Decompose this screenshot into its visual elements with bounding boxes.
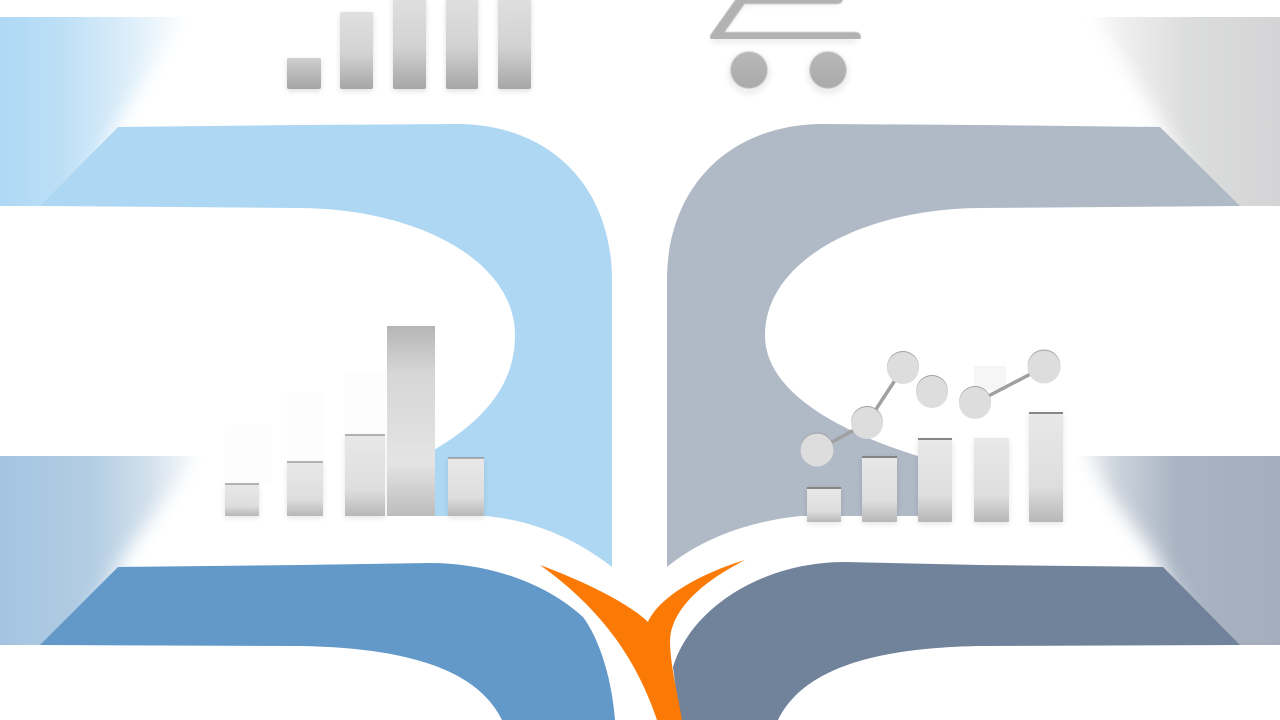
bar 5	[1029, 412, 1063, 522]
bar 3	[918, 438, 952, 522]
bar 3	[345, 435, 385, 516]
icon: orange forked swoosh	[540, 560, 745, 720]
bar top edges	[807, 413, 1063, 488]
icon: shopping cart	[715, 0, 856, 91]
bar reflection backdrop	[225, 370, 385, 484]
bar 2	[287, 462, 323, 516]
bar 4 tall	[387, 326, 435, 516]
bar 4	[974, 438, 1009, 522]
chart: top bar icon	[287, 0, 531, 91]
bar shadows	[807, 414, 1063, 524]
bar 1	[807, 487, 841, 522]
panel: grey curved band	[667, 124, 1240, 567]
marker top rims	[800, 350, 1060, 466]
cart left wheel	[730, 52, 768, 88]
chart: left bar chart	[225, 326, 484, 518]
faint reflection block	[974, 366, 1006, 390]
bar 1	[287, 58, 321, 89]
bar 2	[340, 12, 373, 89]
bar 5	[498, 0, 531, 89]
cart right wheel	[810, 52, 846, 88]
panel: bottom-left blue fade strip	[0, 456, 210, 645]
bar 5	[448, 458, 484, 516]
bar top edges	[225, 435, 484, 484]
bar 1	[225, 484, 259, 516]
cart frame	[715, 0, 856, 37]
panel: blue lower curved band	[40, 563, 615, 720]
cart shadow	[715, 2, 856, 91]
bar shadows	[287, 0, 531, 91]
chart: right bar and line chart	[800, 350, 1063, 524]
panel: top-right grey fade strip	[1080, 17, 1280, 206]
bar 3	[393, 0, 426, 89]
panel: light blue curved band	[40, 124, 612, 567]
bar 2	[862, 456, 897, 522]
bar shadows	[225, 437, 484, 518]
panel: slate lower curved band	[673, 562, 1240, 720]
panel: top-left light blue fade strip	[0, 17, 200, 206]
line segments	[817, 367, 1044, 450]
bar 4	[446, 0, 478, 89]
line markers	[800, 350, 1060, 466]
panel: bottom-right slate fade strip	[1070, 456, 1280, 645]
